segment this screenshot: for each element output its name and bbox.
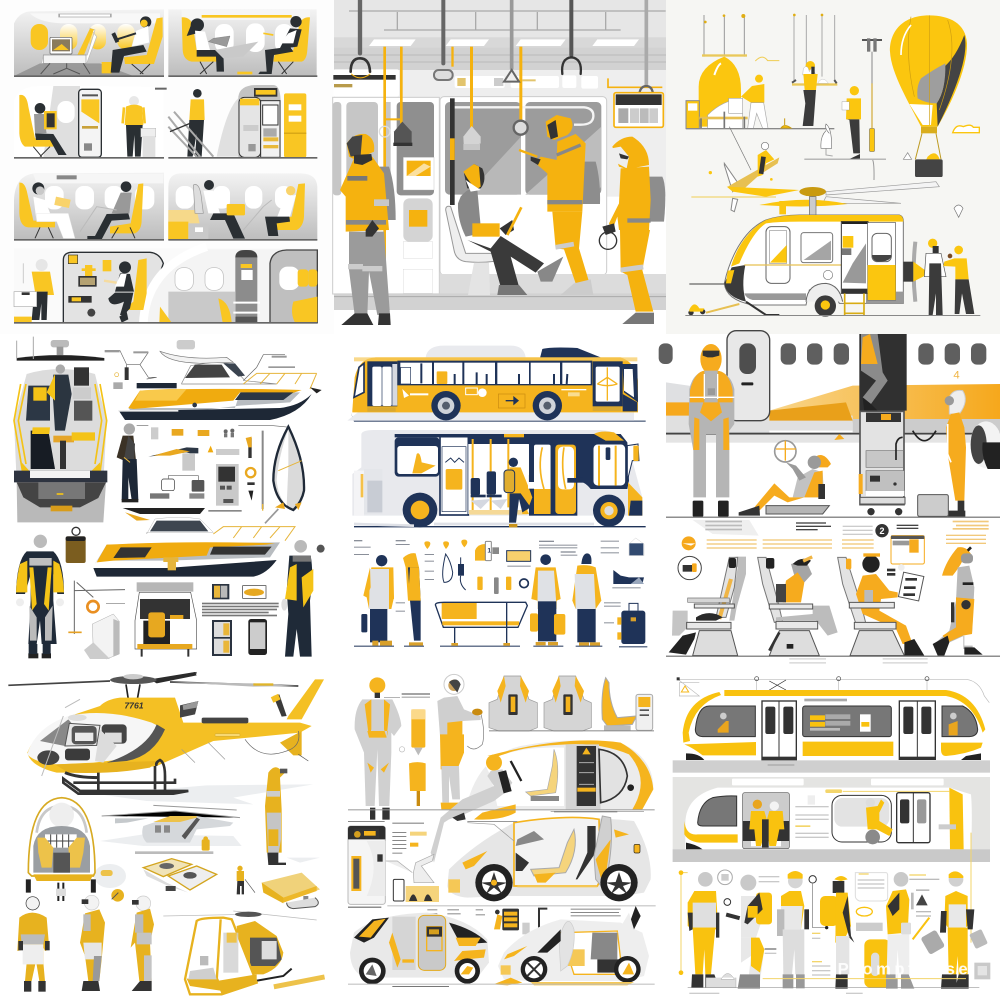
crew seated with globe (739, 434, 844, 516)
hot air balloon (890, 15, 979, 177)
scene: passengers by windows (14, 173, 164, 241)
car cutaway side view (348, 740, 655, 863)
boat cockpit rear view (135, 582, 197, 657)
yellow poles (383, 47, 522, 287)
caption text lines (354, 540, 641, 623)
scene: passenger with laptop (14, 9, 164, 77)
worker on swing platform (781, 14, 837, 128)
suit front view (16, 535, 64, 658)
minivan rear-left (350, 913, 489, 984)
yacht rear cutaway view (14, 337, 107, 522)
door and window panels (333, 97, 607, 294)
dome and maintenance worker (686, 14, 834, 129)
scene: seated reader and standing attendant (14, 86, 167, 159)
digital display (614, 93, 663, 127)
fuselage with windows (659, 343, 1000, 443)
hatchback with open doors (387, 811, 656, 906)
yacht side view lower (87, 508, 295, 577)
train top (673, 690, 990, 773)
yacht side view top (117, 340, 322, 420)
worker 2 seated (446, 164, 563, 295)
grab handles (379, 122, 481, 150)
main helicopter (8, 672, 324, 794)
seats row (489, 676, 654, 731)
scene: passenger with briefcase (168, 173, 317, 241)
caravan (685, 215, 980, 317)
buoy canister (66, 527, 86, 563)
standing suit profile (265, 767, 287, 865)
panel: helicopter and rescue crew (0, 666, 334, 1000)
seat with passenger using tablet (838, 553, 924, 656)
scene: long cabin with crew (14, 247, 317, 324)
open equipment cases (143, 859, 217, 893)
panel: balloon, caravan and helicopter rotor (666, 0, 1000, 334)
bottom faded text blocks (789, 658, 928, 664)
overhead wires (677, 677, 989, 703)
accessories and bench: 1 (487, 547, 491, 554)
crew row (679, 833, 990, 994)
empty seat with blanket (669, 557, 746, 656)
hanging straps (351, 0, 653, 135)
woman with tool (437, 674, 484, 809)
mini icons row (427, 909, 621, 934)
crew standing at engine (918, 390, 1000, 517)
mid text block (678, 520, 989, 580)
charger kiosk (348, 821, 439, 908)
propeller and two workers (903, 239, 974, 315)
accessories and bench (424, 538, 647, 647)
information board (333, 69, 662, 97)
main helicopter: 7761 (124, 700, 144, 710)
crew standing front (689, 344, 734, 517)
cockpit front view (28, 798, 113, 901)
hanging instrument (862, 38, 882, 180)
suit side view (281, 540, 325, 657)
glass cabin with helicopter (163, 911, 325, 994)
panel: aircraft ground crew and seats (659, 331, 1000, 668)
worker on rotor blade (691, 127, 963, 217)
ceiling lights (369, 39, 639, 46)
worker 3 with tablet (519, 115, 600, 295)
mid text block: 2 (879, 526, 884, 536)
scene: two passengers facing (168, 9, 317, 77)
panel: aircraft cabin scenes (0, 0, 334, 334)
fuselage with windows: 4 (953, 370, 960, 382)
panel: metro interior with protective suits (333, 0, 668, 334)
bus cutaway side view (352, 430, 646, 527)
panel: yacht blueprints (0, 334, 334, 668)
small crew figure (237, 866, 255, 894)
yellow supply box (262, 873, 320, 909)
equipment icons row (137, 426, 290, 511)
watermark: PromptBase (838, 959, 968, 978)
helmet (111, 889, 124, 902)
rescue gear (68, 581, 125, 659)
small side helicopter (102, 805, 240, 854)
panel: bus illustrations (334, 334, 668, 668)
ground shadows (94, 784, 320, 888)
sedan with gull-wing doors (348, 906, 655, 987)
panel: electric car concepts (334, 666, 668, 1000)
manual page and devices (202, 584, 279, 656)
annotation leader lines (105, 350, 295, 389)
suit standing front (355, 677, 430, 820)
crew member in side profile (117, 423, 138, 502)
train middle cutaway (673, 777, 990, 862)
scene: attendant at galley with cabinets (168, 85, 317, 159)
worker with clipboard (804, 86, 886, 160)
worker 4 with coil (599, 137, 665, 324)
passenger figures with luggage (354, 553, 602, 647)
panel: train illustrations and crew (666, 666, 1000, 1000)
boarding stairs cart (859, 334, 936, 515)
rescue crew front and side figures (17, 895, 154, 992)
hull top view (265, 427, 304, 523)
bus side view top (347, 346, 646, 422)
floor (334, 274, 668, 310)
worker 1 (340, 134, 396, 325)
seat with passenger in headset (758, 555, 838, 656)
crew walking in orange suit (933, 547, 983, 656)
aircraft door (727, 331, 770, 421)
